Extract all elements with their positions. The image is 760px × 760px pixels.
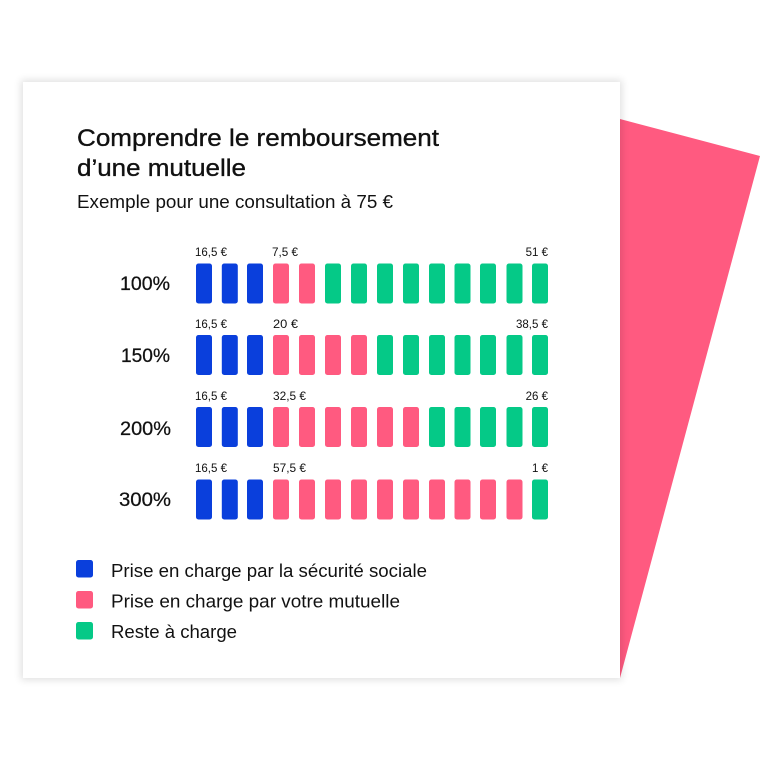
row label 100%: 100% — [120, 274, 170, 295]
amounts 200%: 32,5 € — [273, 391, 307, 403]
amounts 200% — [195, 391, 549, 403]
legend: sécurité sociale: Prise en charge par la sécurité sociale — [111, 561, 427, 581]
amounts 200%: 16,5 € — [195, 391, 228, 403]
legend: reste à charge: Reste à charge — [111, 622, 237, 642]
amounts 150% — [195, 319, 549, 331]
row label 200%: 200% — [120, 419, 171, 440]
pink background sheet — [620, 119, 760, 678]
row label 300%: 300% — [119, 490, 171, 511]
amounts 150%: 16,5 € — [195, 319, 228, 331]
title — [77, 125, 439, 182]
amounts 300%: 1 € — [532, 463, 549, 475]
amounts 200%: 26 € — [526, 391, 549, 403]
amounts 150%: 20 € — [273, 319, 299, 331]
bars 100% — [196, 264, 548, 304]
amounts 300% — [195, 463, 549, 475]
white card — [23, 82, 620, 678]
legend: mutuelle: Prise en charge par votre mutuelle — [111, 592, 400, 612]
card shadow — [21, 80, 622, 680]
amounts 100%: 51 € — [526, 247, 549, 259]
amounts 100%: 7,5 € — [272, 247, 299, 259]
amounts 300%: 57,5 € — [273, 463, 307, 475]
bars 300% — [196, 480, 548, 520]
bars 200% — [196, 407, 548, 447]
title: d’une mutuelle — [77, 155, 246, 182]
amounts 100%: 16,5 € — [195, 247, 228, 259]
row: 200% — [120, 391, 549, 447]
row label 150%: 150% — [121, 346, 170, 367]
amounts 150%: 38,5 € — [516, 319, 549, 331]
bars 150% — [196, 335, 548, 375]
title: Comprendre le remboursement — [77, 125, 439, 152]
subtitle: Exemple pour une consultation à 75 € — [77, 192, 393, 212]
row: 300% — [119, 463, 549, 520]
legend — [76, 560, 427, 642]
amounts 100% — [195, 247, 549, 259]
amounts 300%: 16,5 € — [195, 463, 228, 475]
row: 150% — [121, 319, 549, 375]
row: 100% — [120, 247, 549, 304]
